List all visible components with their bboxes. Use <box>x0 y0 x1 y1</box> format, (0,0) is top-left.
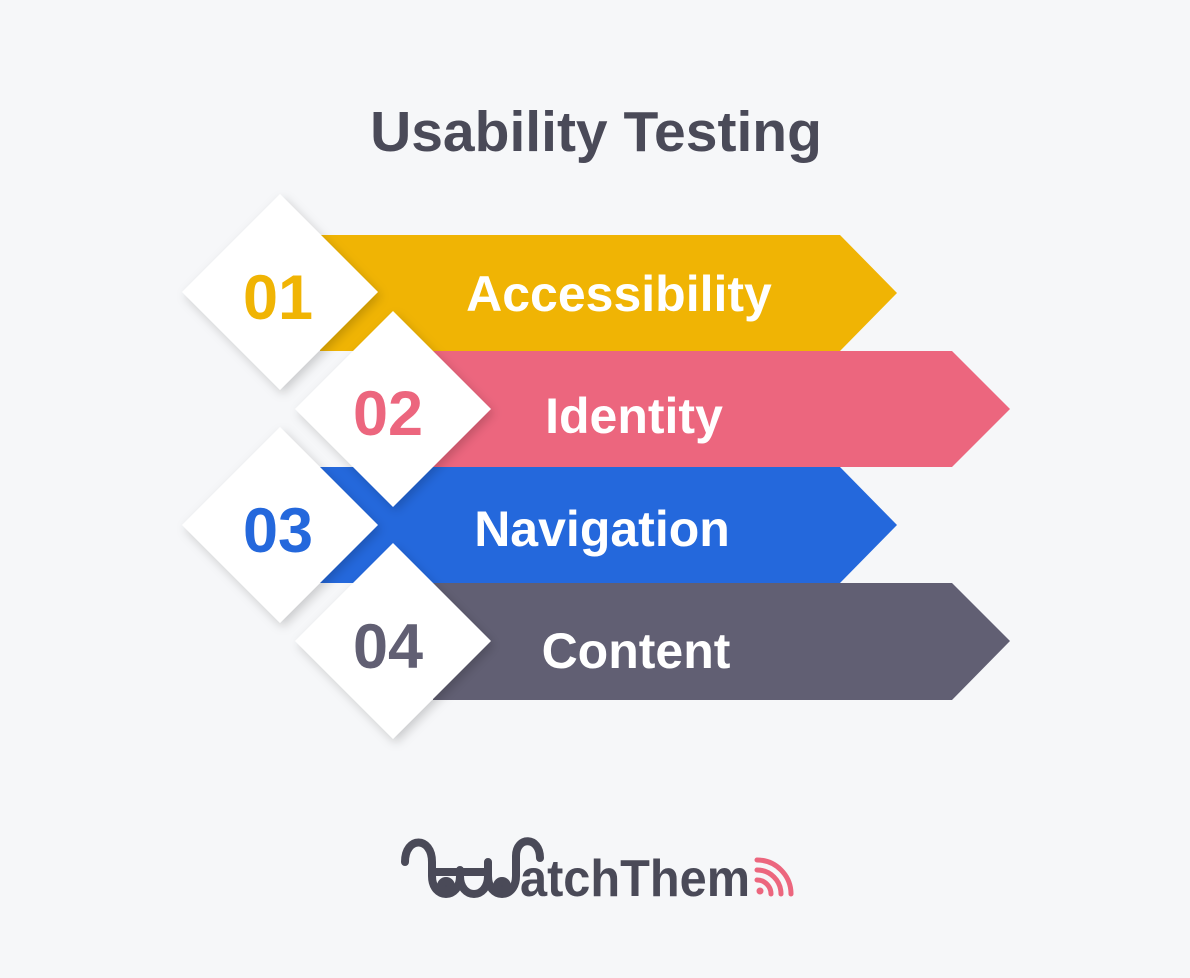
diamond 03 <box>182 427 378 623</box>
diamond 03: 03 <box>243 496 313 566</box>
band: accessibility <box>320 235 897 351</box>
band: accessibility: Accessibility <box>466 266 772 322</box>
band: navigation: Navigation <box>474 501 730 557</box>
diamond 04 <box>295 543 491 739</box>
icon: glasses W <box>405 841 540 894</box>
logo <box>405 841 791 908</box>
band: identity <box>433 351 1010 467</box>
diamond 01 <box>182 194 378 390</box>
diamond 04: 04 <box>353 612 423 682</box>
diamond 01: 01 <box>243 263 313 333</box>
band: identity: Identity <box>545 388 723 444</box>
icon: signal <box>756 860 791 894</box>
band: content: Content <box>542 623 731 679</box>
diamond 02: 02 <box>353 379 423 449</box>
band: content <box>433 583 1010 700</box>
title: Usability Testing <box>370 100 822 164</box>
band: navigation <box>320 467 897 583</box>
diamond 02 <box>295 311 491 507</box>
logo text: atchThem <box>520 850 750 908</box>
